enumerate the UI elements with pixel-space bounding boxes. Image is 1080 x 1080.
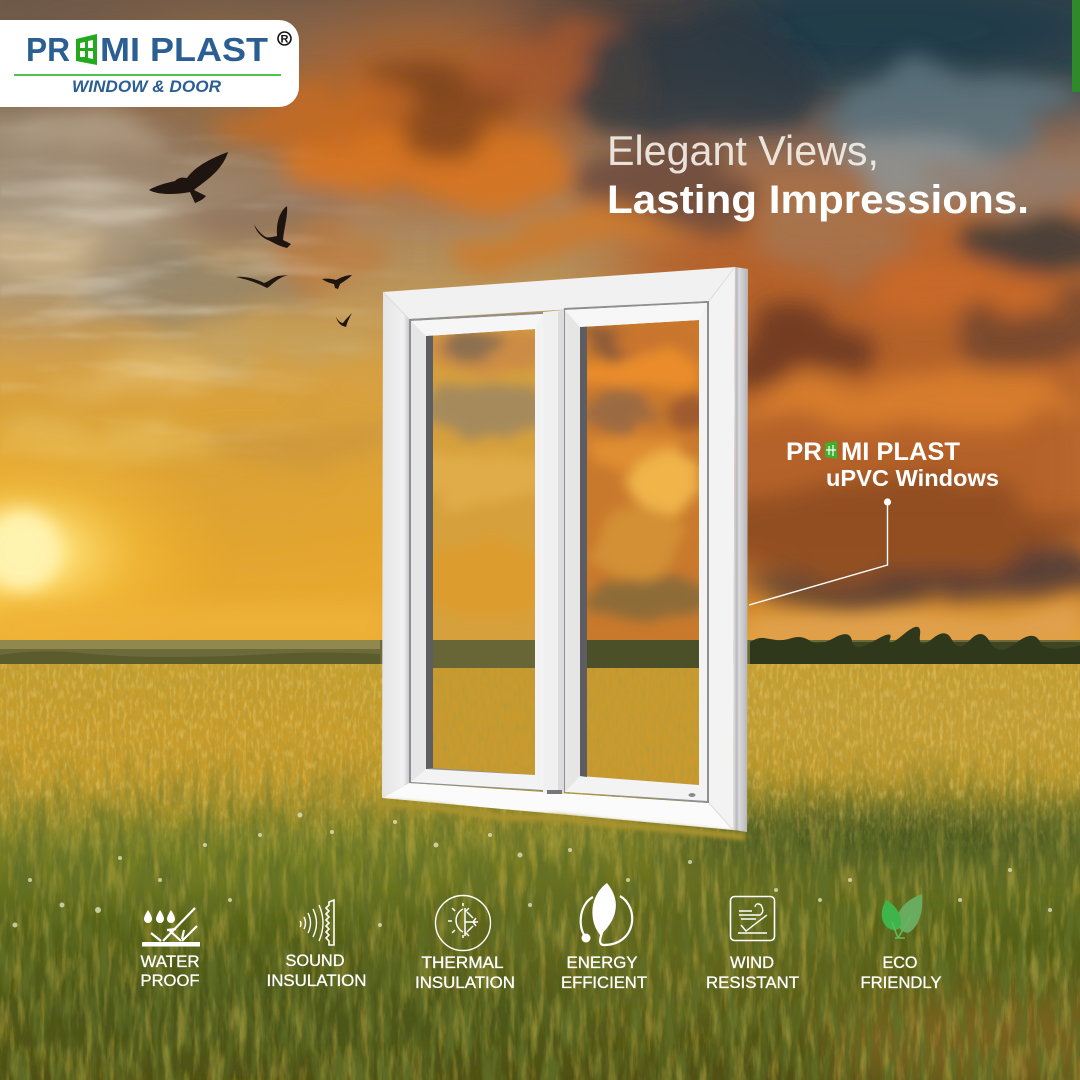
callout brand text: MI PLAST	[841, 438, 960, 466]
sky background	[0, 0, 1080, 682]
logo tagline: WINDOW & DOOR	[72, 78, 221, 96]
bird 4	[322, 275, 352, 289]
wild flowers	[12, 812, 1052, 928]
sun glow	[0, 455, 171, 620]
registered mark: R	[281, 34, 289, 46]
left sash	[409, 312, 543, 791]
feature: wind resistant: WIND	[730, 954, 774, 972]
feature: wind resistant	[706, 896, 799, 992]
feature: eco friendly: ECO	[882, 954, 918, 972]
birds	[149, 152, 352, 327]
feature: sound insulation: INSULATION	[266, 972, 366, 990]
fine distant grass	[0, 664, 1080, 860]
headline	[607, 127, 1029, 222]
feature icons row	[140, 883, 942, 992]
bird 1	[149, 152, 228, 203]
logo card	[0, 20, 299, 107]
callout: Premi Plast uPVC Windows	[749, 438, 999, 605]
feature: energy efficient	[561, 883, 647, 992]
callout product text: uPVC Windows	[826, 465, 999, 491]
leader line	[749, 498, 891, 605]
grass field	[0, 664, 1080, 1080]
headline line 1: Elegant Views,	[607, 127, 879, 174]
corner accent	[1072, 0, 1080, 92]
registered mark	[278, 32, 291, 46]
feature: water proof: PROOF	[140, 972, 200, 990]
feature: thermal insulation: THERMAL	[422, 954, 504, 972]
near grass blades	[0, 748, 1080, 1080]
bird 5	[336, 313, 352, 327]
logo wordmark	[26, 31, 268, 68]
feature: water proof	[140, 908, 200, 990]
feature: sound insulation: SOUND	[286, 952, 345, 970]
horizon light	[154, 594, 1080, 640]
logo rule	[14, 74, 281, 76]
feature: eco friendly	[860, 894, 942, 992]
right sash	[564, 301, 709, 803]
logo window icon	[76, 34, 97, 65]
centre mullion	[543, 310, 564, 793]
bird 3	[236, 275, 288, 288]
feature: wind resistant: RESISTANT	[706, 974, 799, 992]
logo wordmark: MI PLAST	[100, 31, 268, 68]
headline line 2: Lasting Impressions.	[607, 178, 1029, 222]
feature: eco friendly: FRIENDLY	[860, 974, 942, 992]
right side storm sky	[0, 0, 1080, 600]
outer frame	[382, 267, 748, 832]
logo wordmark: PR	[26, 31, 70, 68]
wispy cirrus clouds	[0, 154, 376, 454]
feature: thermal insulation	[415, 896, 515, 992]
bird 2	[254, 206, 291, 248]
callout brand text	[786, 438, 960, 466]
window product	[378, 267, 748, 837]
grass over window base	[378, 803, 745, 837]
feature: water proof: WATER	[140, 953, 200, 971]
feature: energy efficient: ENERGY	[566, 954, 638, 972]
treeline	[0, 627, 1080, 677]
feature: energy efficient: EFFICIENT	[561, 974, 647, 992]
callout brand text: PR	[786, 438, 822, 466]
window panes scenery	[433, 320, 699, 785]
feature: thermal insulation: INSULATION	[415, 974, 515, 992]
feature: sound insulation	[266, 900, 366, 990]
